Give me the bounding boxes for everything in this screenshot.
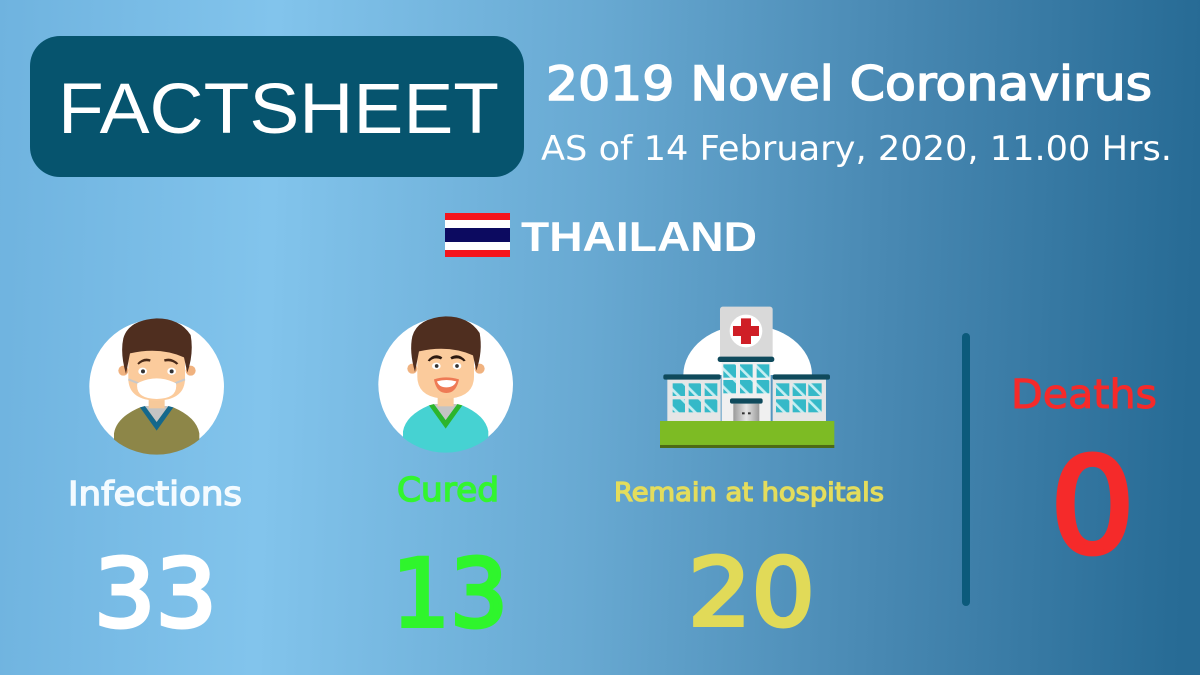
- label: Infections: Infections: [68, 474, 242, 513]
- date line: AS of 14 February, 2020, 11.00 Hrs.: [541, 129, 1172, 169]
- panel: remain at hospitals: [614, 307, 884, 648]
- panel: cured: [378, 316, 513, 649]
- number: 0: 0: [1050, 430, 1135, 584]
- country heading: [445, 213, 757, 260]
- label: Cured: Cured: [397, 470, 499, 509]
- label: Remain at hospitals: Remain at hospitals: [614, 478, 884, 508]
- panel: infections: [68, 318, 242, 649]
- icon: hospital building: [660, 307, 834, 448]
- icon: Thai flag: [445, 213, 510, 257]
- icon: smiling person: [378, 316, 513, 458]
- country name: THAILAND: [521, 213, 757, 260]
- label: Deaths: Deaths: [1011, 372, 1157, 418]
- header badge: FACTSHEET: FACTSHEET: [58, 70, 499, 149]
- icon: masked person: [89, 318, 224, 460]
- red cross sign: [730, 315, 762, 347]
- panel: deaths: [1011, 372, 1157, 584]
- number: 20: 20: [688, 539, 815, 648]
- header badge: FACTSHEET: [30, 36, 524, 177]
- number: 13: 13: [392, 540, 508, 649]
- divider: [962, 333, 970, 606]
- number: 33: 33: [94, 540, 217, 649]
- title: 2019 Novel Coronavirus: [546, 57, 1152, 112]
